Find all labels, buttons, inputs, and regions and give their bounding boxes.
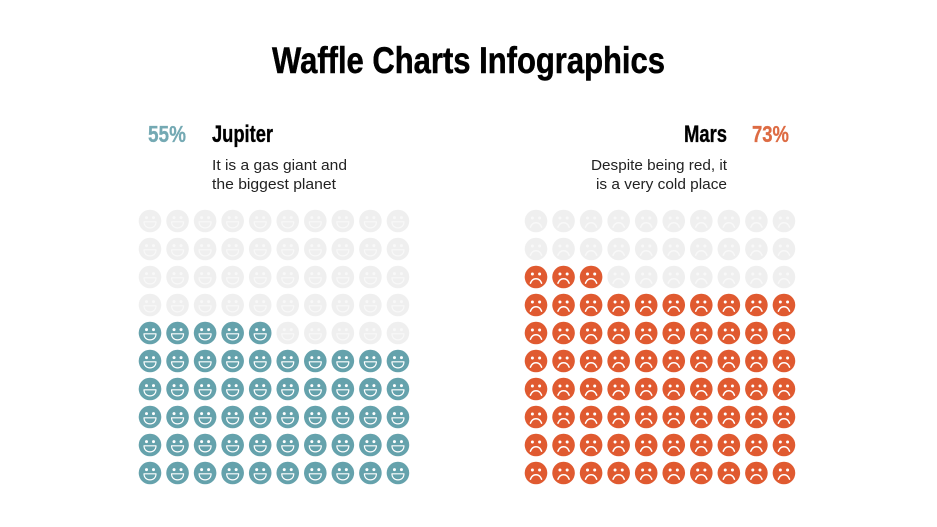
panel: Mars	[525, 121, 795, 484]
panel: Jupiter	[139, 121, 409, 484]
Mars description: Despite being red, it	[591, 158, 727, 174]
waffle chart: Jupiter 55 percent smiling faces	[139, 210, 409, 484]
Jupiter heading: Jupiter	[212, 121, 273, 148]
Mars description: is a very cold place	[596, 177, 727, 193]
Jupiter percentage: 55%	[148, 121, 186, 147]
Mars heading: Mars	[684, 121, 727, 148]
title: Waffle Charts Infographics	[272, 40, 665, 81]
waffle chart: Mars 73 percent frowning faces	[525, 210, 795, 484]
Jupiter description: It is a gas giant and	[212, 158, 347, 174]
Mars percentage: 73%	[752, 121, 789, 147]
Jupiter description: the biggest planet	[212, 177, 336, 193]
